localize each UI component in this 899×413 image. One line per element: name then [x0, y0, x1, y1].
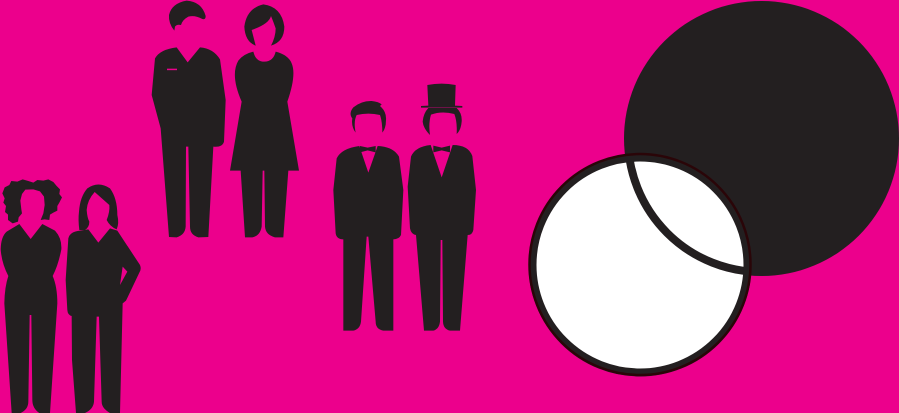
figure: man in V-neck top [152, 47, 226, 237]
figure: woman in dress [230, 52, 299, 237]
venn diagram [530, 1, 899, 375]
circle: large dark [624, 1, 899, 276]
figure: woman with hand on hip [66, 228, 141, 413]
couple: two grooms [333, 84, 476, 331]
icon: bow tie [360, 146, 376, 152]
icon: man's swept hair [169, 1, 206, 31]
icon: groom hair [351, 101, 386, 133]
icon: curly hair [2, 179, 62, 223]
figure: groom in tall suit [408, 145, 476, 331]
couple: man and woman in dress [152, 1, 299, 237]
arc: overlap band [626, 162, 744, 275]
icon: long hair [79, 184, 118, 230]
icon: top hat [421, 84, 462, 108]
icon: bow tie [433, 146, 450, 152]
icon: bob hair [244, 4, 284, 46]
figure: woman with crossed arms [1, 224, 61, 413]
couple: two women, curly hair and long hair [1, 179, 141, 413]
icon: groom hair under hat [423, 108, 462, 135]
circle: outer outline edge [530, 154, 750, 375]
icon: shirt pocket [167, 69, 177, 70]
circle: white with dark outline [532, 158, 748, 372]
figure: groom in suit [333, 146, 403, 331]
